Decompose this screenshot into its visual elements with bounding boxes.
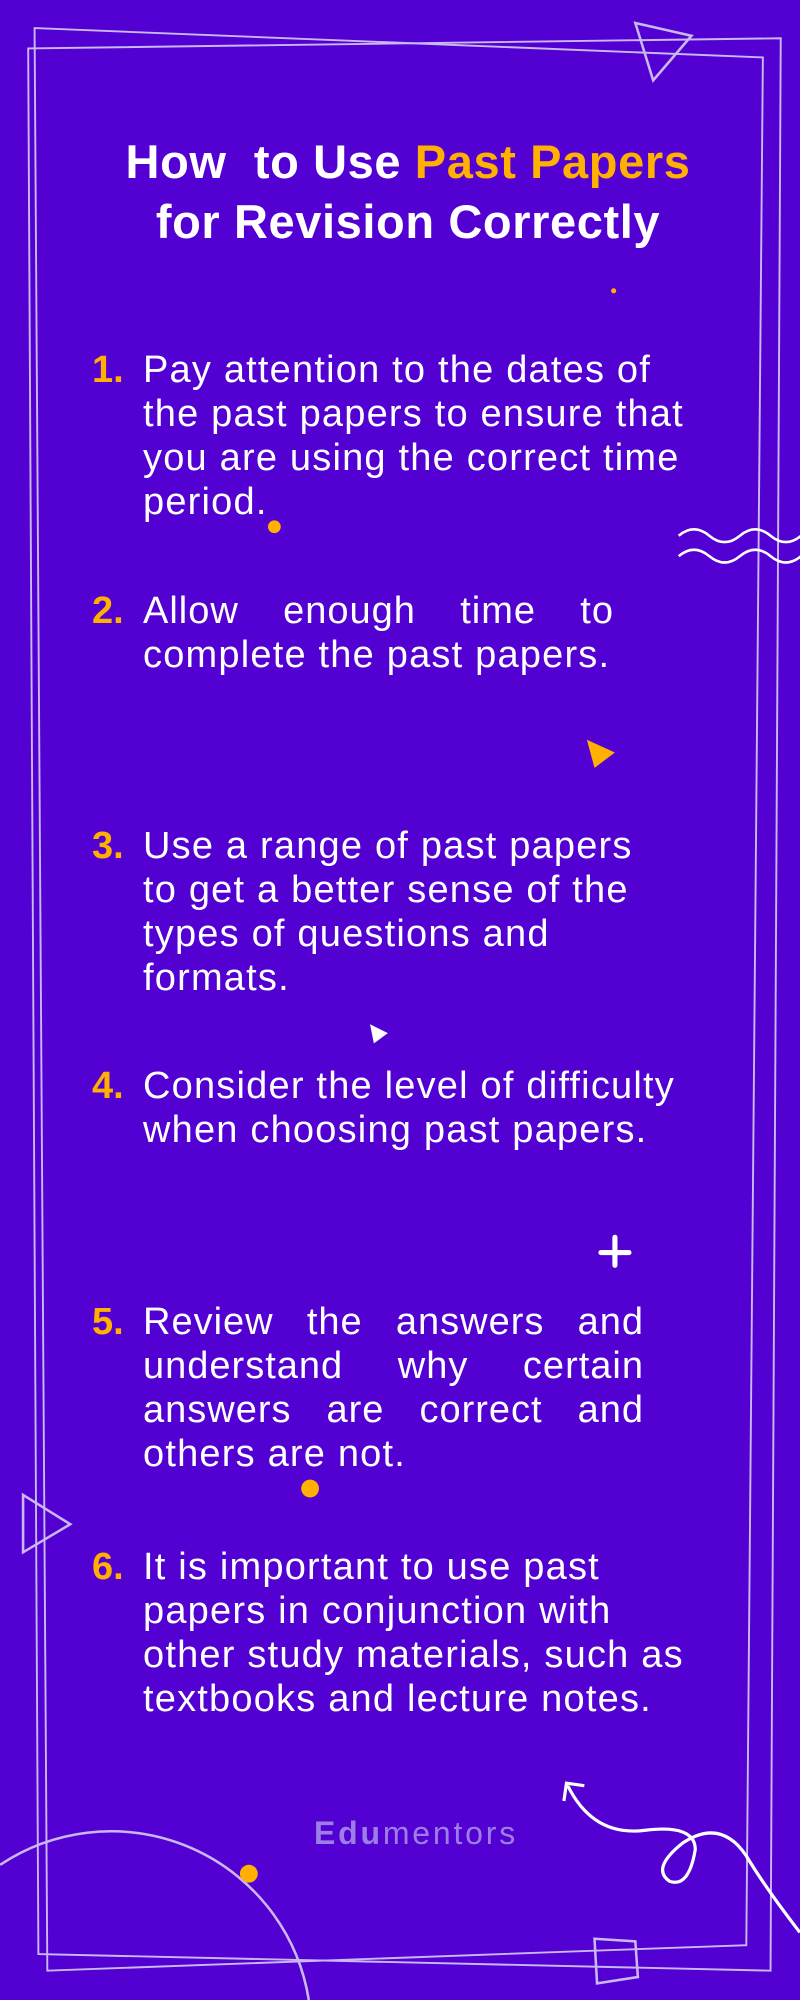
text: It is important to use past: [143, 1546, 600, 1588]
text: when choosing past papers.: [143, 1109, 647, 1151]
item 3: [92, 825, 633, 999]
text: complete the past papers.: [143, 634, 610, 676]
text: period.: [143, 481, 268, 523]
text: 3.: [92, 825, 124, 867]
text: Consider the level of difficulty: [143, 1065, 675, 1107]
text: you are using the correct time: [143, 437, 680, 479]
item 1: [92, 349, 684, 523]
text: answers are correct and: [143, 1389, 644, 1431]
logo: Edumentors: [314, 1815, 518, 1851]
text: to get a better sense of the: [143, 869, 629, 911]
item 5: [92, 1301, 644, 1475]
text: formats.: [143, 957, 290, 999]
item 6: [92, 1546, 684, 1720]
text: 5.: [92, 1301, 124, 1343]
text: textbooks and lecture notes.: [143, 1678, 652, 1720]
text: Review the answers and: [143, 1301, 644, 1343]
text: Allow enough time to: [143, 590, 614, 632]
text: papers in conjunction with: [143, 1590, 611, 1632]
text: 6.: [92, 1546, 124, 1588]
text: the past papers to ensure that: [143, 393, 684, 435]
text: 1.: [92, 349, 124, 391]
text: other study materials, such as: [143, 1634, 684, 1676]
item 2: [92, 590, 614, 676]
text: Pay attention to the dates of: [143, 349, 651, 391]
title: How to Use Past Papers for Revision Correctly: [126, 135, 690, 248]
text: understand why certain: [143, 1345, 644, 1387]
text: 2.: [92, 590, 124, 632]
text: types of questions and: [143, 913, 550, 955]
text: Use a range of past papers: [143, 825, 633, 867]
text: 4.: [92, 1065, 124, 1107]
item 4: [92, 1065, 675, 1151]
text: others are not.: [143, 1433, 406, 1475]
